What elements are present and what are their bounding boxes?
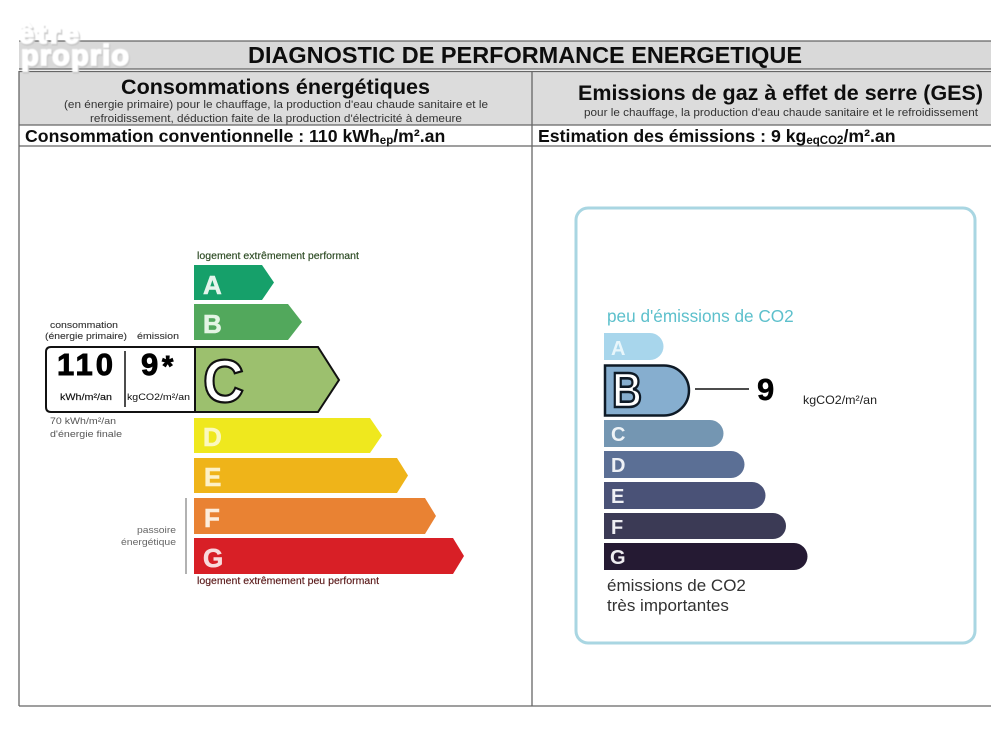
class A: A	[611, 338, 625, 360]
class D	[194, 418, 382, 453]
class A	[604, 333, 664, 360]
logo: être proprio: être	[20, 20, 80, 50]
bottom label: logement extrêmement peu performant	[197, 576, 379, 587]
value box: kWh/m²/an	[60, 392, 112, 403]
class E	[604, 482, 766, 509]
column labels: consommation	[50, 319, 118, 330]
column labels: émission	[137, 330, 179, 341]
class F	[194, 498, 436, 534]
class G	[194, 538, 464, 574]
heading: emissions: pour le chauffage, la production d'eau chaude sanitaire et le refroidissement	[584, 107, 978, 119]
value box: 110	[57, 347, 113, 382]
energy chart	[45, 251, 464, 587]
heading: emissions	[578, 81, 983, 119]
class G: G	[610, 547, 626, 569]
unit: kgCO2/m²/an	[803, 393, 877, 407]
class A: A	[203, 270, 222, 300]
class D: D	[203, 422, 222, 452]
value box: kgCO2/m²/an	[127, 392, 190, 403]
connector line	[695, 388, 749, 390]
heading: consommations: refroidissement, déduction faite de la production d'électricité à demeure	[90, 113, 462, 125]
class D: D	[611, 455, 625, 477]
value box	[46, 347, 195, 412]
class E: E	[611, 486, 624, 508]
value 9: 9	[757, 372, 774, 407]
class B	[194, 304, 302, 340]
title: DIAGNOSTIC DE PERFORMANCE ENERGETIQUE	[248, 42, 802, 68]
estimated emissions: /m².an	[843, 126, 896, 146]
top label: logement extrêmement performant	[197, 251, 359, 262]
class C highlighted	[195, 347, 339, 415]
class C: C	[611, 424, 625, 446]
class B highlighted: B	[612, 364, 642, 418]
class G	[604, 543, 808, 570]
class C	[604, 420, 724, 447]
heading: emissions: Emissions de gaz à effet de serre (GES)	[578, 81, 983, 105]
class B highlighted	[605, 364, 689, 418]
value box: 9	[141, 347, 158, 382]
passoire energetique: passoire	[137, 524, 176, 535]
class C highlighted: C	[203, 348, 244, 415]
heading: consommations: Consommations énergétiques	[121, 75, 430, 99]
conventional consumption: Consommation conventionnelle : 110 kWh	[25, 126, 380, 146]
class A	[194, 265, 274, 300]
class E	[194, 458, 408, 493]
logo: être proprio: être	[19, 19, 79, 49]
passoire energetique	[121, 498, 186, 574]
final energy note	[50, 415, 122, 439]
class B: B	[203, 309, 222, 339]
class G: G	[203, 543, 223, 573]
emissions panel	[576, 208, 975, 643]
estimated emissions: Estimation des émissions : 9 kg	[538, 126, 806, 146]
class E: E	[204, 462, 221, 492]
bottom label	[607, 576, 746, 615]
column labels: (énergie primaire)	[45, 330, 127, 341]
heading: consommations	[64, 75, 488, 125]
bottom label: émissions de CO2	[607, 576, 746, 595]
heading: consommations: (en énergie primaire) pour le chauffage, la production d'eau chaude sanitaire et le	[64, 99, 488, 111]
conventional consumption: ep	[380, 135, 393, 147]
final energy note: d'énergie finale	[50, 428, 122, 439]
estimated emissions: eqCO2	[806, 135, 843, 147]
final energy note: 70 kWh/m²/an	[50, 415, 116, 426]
class D	[604, 451, 744, 478]
class F: F	[611, 517, 623, 539]
class F: F	[204, 503, 220, 533]
passoire energetique: énergétique	[121, 536, 176, 547]
logo: être proprio: proprio	[22, 42, 130, 74]
column labels	[45, 319, 179, 341]
bottom label: très importantes	[607, 596, 729, 615]
logo: être proprio	[19, 19, 130, 74]
top label: peu d'émissions de CO2	[607, 306, 794, 326]
value box: *	[162, 351, 174, 383]
logo: être proprio: proprio	[21, 40, 129, 72]
class F	[604, 513, 786, 539]
conventional consumption: /m².an	[393, 126, 445, 146]
